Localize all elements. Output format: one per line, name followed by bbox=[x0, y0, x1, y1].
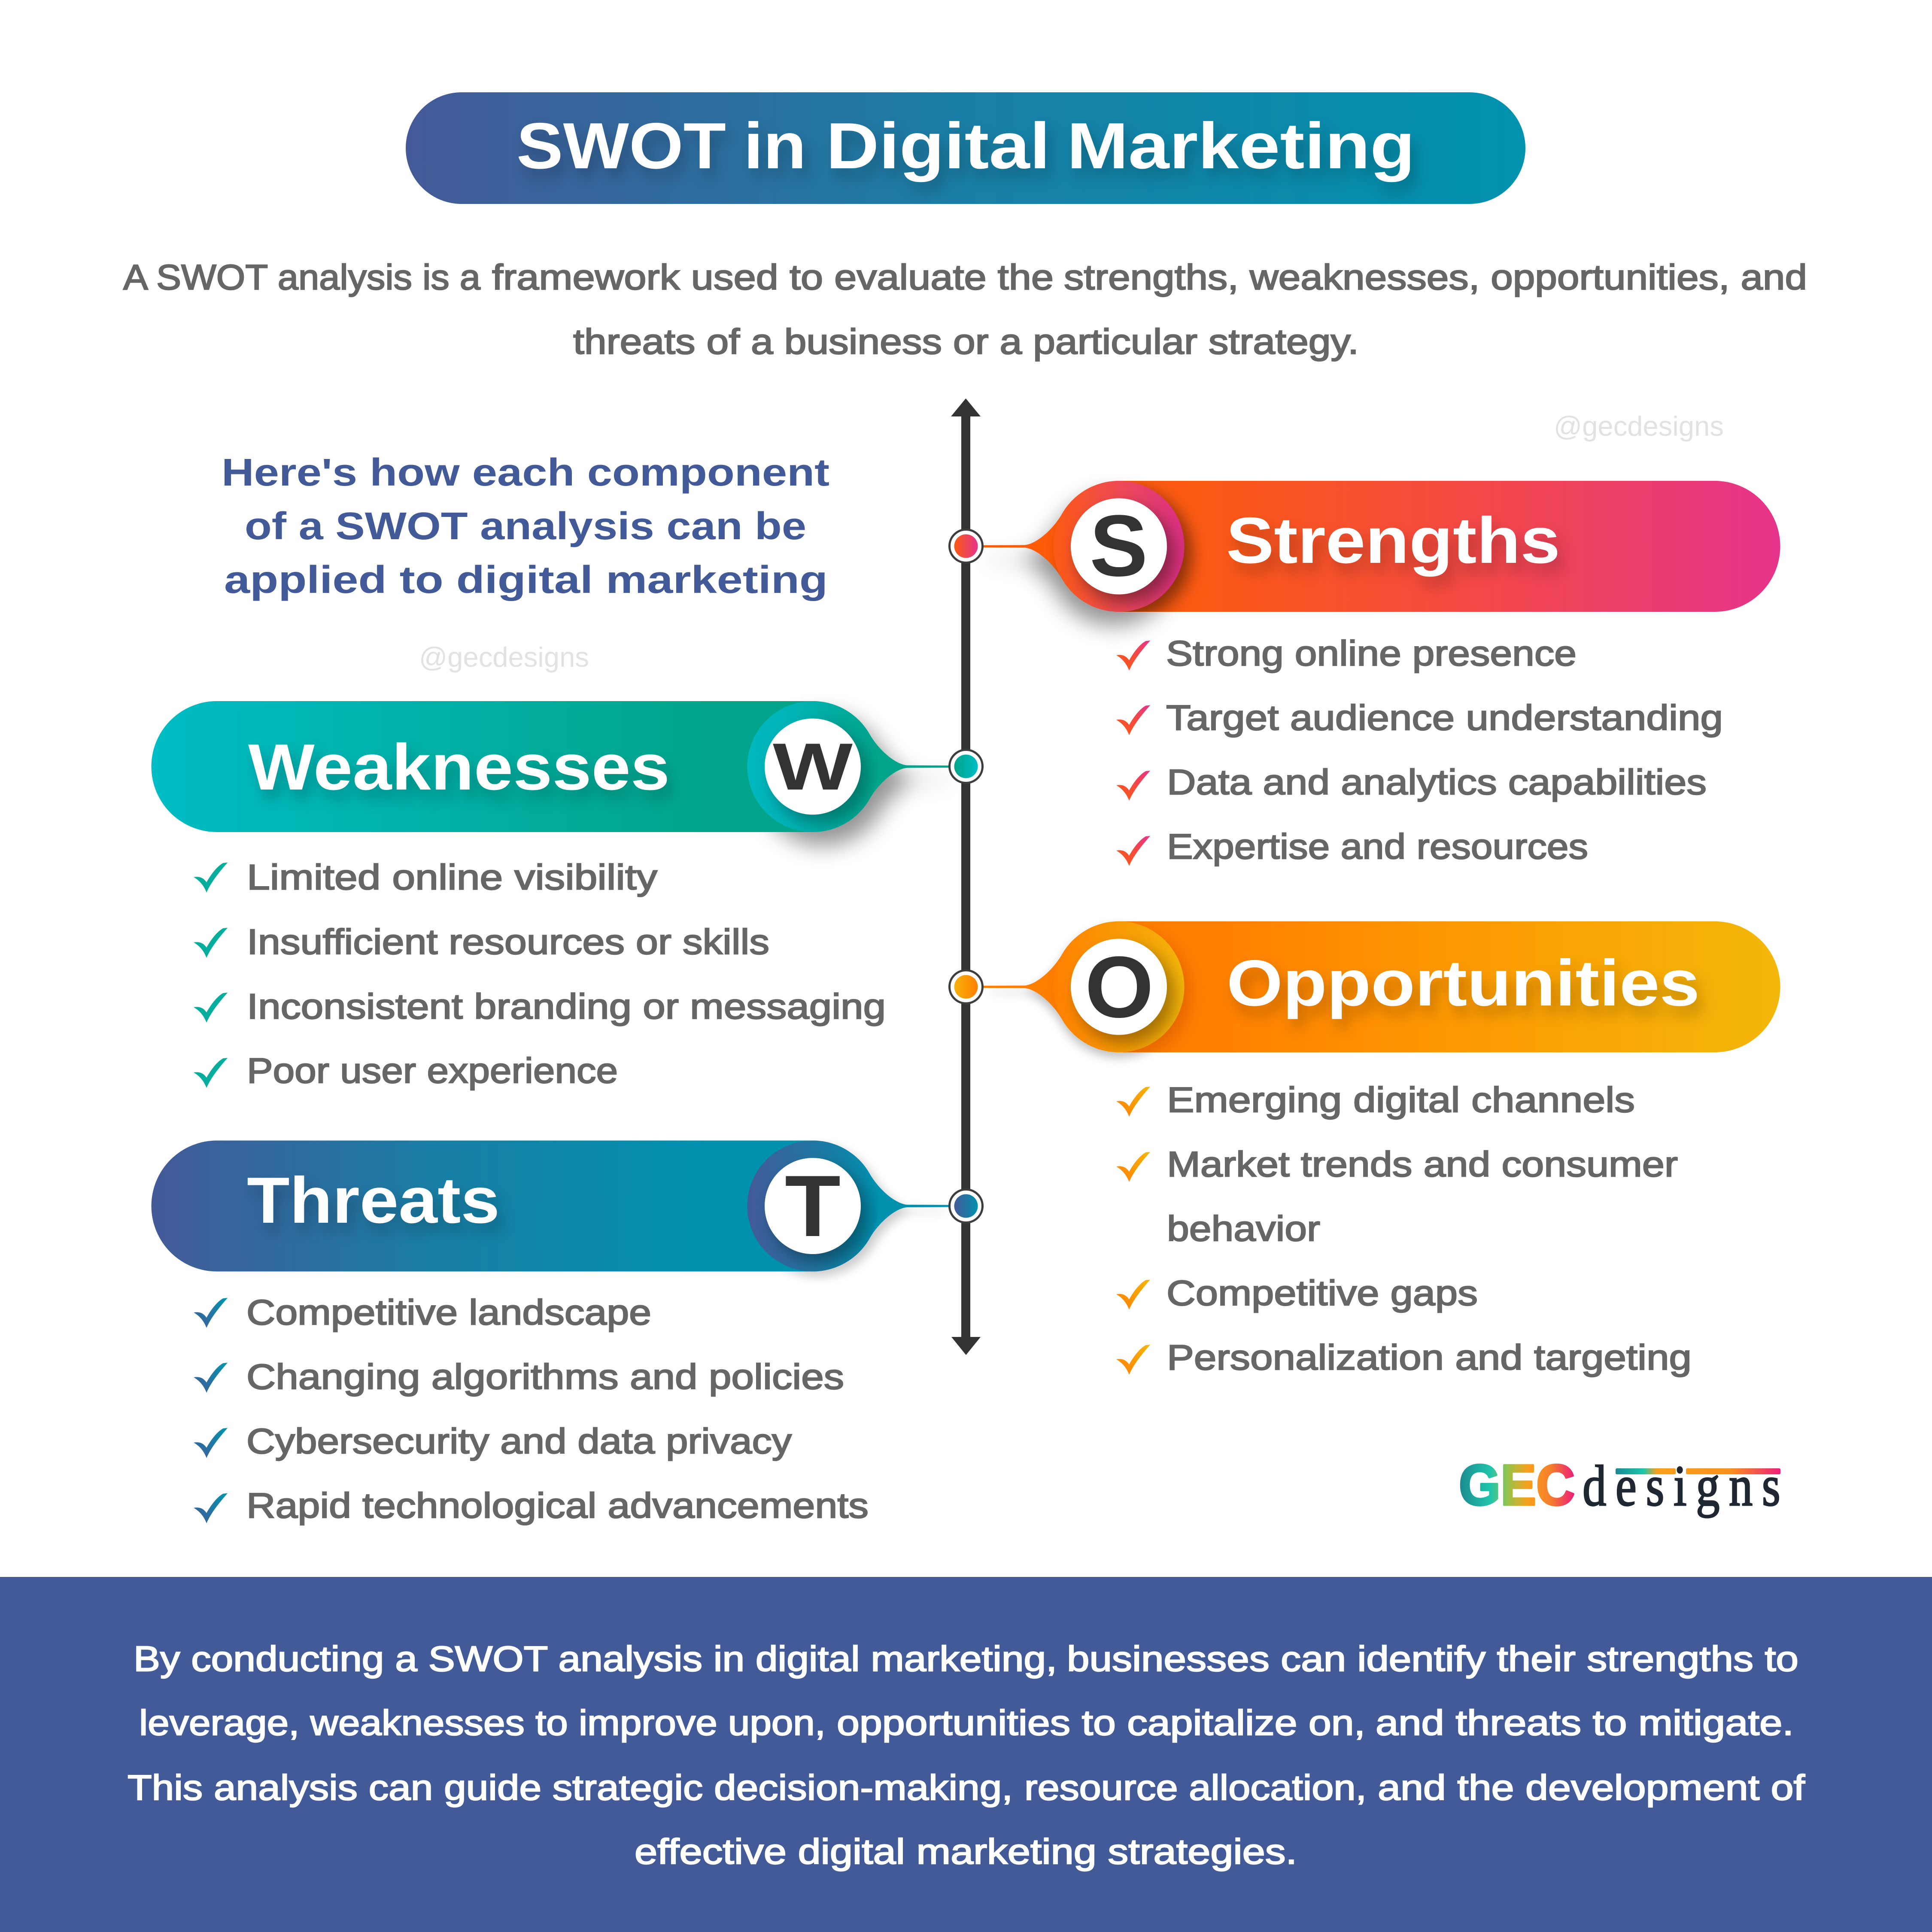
bar shape bbox=[151, 1140, 948, 1272]
intro text bbox=[123, 257, 1807, 361]
footer text: and threats to mitigate. bbox=[1376, 1703, 1794, 1743]
title: Marketing bbox=[1067, 109, 1415, 182]
title: SWOT bbox=[516, 109, 726, 182]
intro text: strengths, weaknesses, opportunities, and bbox=[1064, 257, 1807, 297]
letter O: O bbox=[1085, 939, 1154, 1036]
list: strengths: Data and analytics capabilities bbox=[1167, 762, 1707, 802]
list: strengths bbox=[1116, 633, 1723, 866]
list: threats: Rapid technological advancements bbox=[246, 1485, 869, 1525]
list: opportunities: Personalization and targeting bbox=[1167, 1337, 1692, 1377]
banner: Weaknesses bbox=[151, 701, 982, 846]
list: threats: Cybersecurity and data privacy bbox=[246, 1421, 792, 1461]
footer text: businesses can identify their strengths to bbox=[1067, 1639, 1798, 1679]
label Weaknesses: Weaknesses bbox=[248, 731, 670, 804]
node O bbox=[950, 970, 982, 1003]
logo: GEC designs bbox=[1459, 1453, 1780, 1518]
list: weaknesses: Insufficient resources or skills bbox=[247, 922, 769, 962]
list: threats: Competitive landscape bbox=[246, 1292, 651, 1332]
list: threats: Changing algorithms and policies bbox=[246, 1357, 844, 1397]
intro text: framework used to evaluate the bbox=[492, 257, 1054, 297]
footer text bbox=[128, 1639, 1805, 1871]
lobe shadow bbox=[985, 495, 1179, 626]
footer text: opportunities to capitalize on, bbox=[837, 1703, 1365, 1743]
watermark right: @gecdesigns bbox=[1554, 410, 1724, 442]
banner: Strengths bbox=[950, 481, 1780, 626]
list: opportunities bbox=[1116, 1080, 1692, 1377]
list: weaknesses: Inconsistent branding or messaging bbox=[247, 987, 886, 1026]
logo: GEC designs: GEC bbox=[1459, 1453, 1575, 1517]
node W bbox=[950, 750, 982, 783]
list: opportunities: behavior bbox=[1167, 1209, 1320, 1249]
bar shape bbox=[983, 481, 1780, 619]
lobe shadow bbox=[757, 715, 952, 846]
list: opportunities: Market trends and consumer bbox=[1167, 1144, 1678, 1184]
heading: how each component applies: applied to digital marketing bbox=[224, 559, 828, 601]
list: opportunities: Emerging digital channels bbox=[1167, 1080, 1635, 1120]
list: strengths: Target audience understanding bbox=[1166, 698, 1723, 738]
heading: how each component applies: Here's how each component bbox=[222, 451, 829, 494]
list: strengths: Expertise and resources bbox=[1167, 826, 1588, 866]
bar shape bbox=[983, 921, 1780, 1059]
footer text: By conducting a SWOT analysis in digital marketing, bbox=[134, 1639, 1057, 1679]
list: weaknesses: Limited online visibility bbox=[247, 857, 658, 897]
label Opportunities: Opportunities bbox=[1227, 947, 1700, 1020]
list: weaknesses bbox=[194, 857, 886, 1091]
lobe shadow bbox=[752, 1145, 947, 1277]
intro text: threats of a business or a particular strategy. bbox=[573, 322, 1359, 361]
list: weaknesses: Poor user experience bbox=[247, 1051, 618, 1091]
footer text: resource allocation, bbox=[1024, 1768, 1367, 1807]
footer text: effective digital marketing strategies. bbox=[635, 1832, 1297, 1871]
watermark left: @gecdesigns bbox=[419, 641, 589, 673]
heading: how each component applies bbox=[222, 451, 829, 601]
title: in bbox=[744, 109, 806, 182]
heading: how each component applies: of a SWOT analysis can be bbox=[245, 505, 806, 548]
title banner bbox=[406, 92, 1525, 204]
footer text: leverage, weaknesses to improve upon, bbox=[139, 1703, 826, 1743]
label Threats: Threats bbox=[247, 1164, 500, 1237]
letter T: T bbox=[785, 1157, 841, 1255]
node S bbox=[950, 530, 982, 562]
title bbox=[516, 109, 1415, 182]
footer text: and the development of bbox=[1378, 1768, 1805, 1807]
label Strengths: Strengths bbox=[1226, 504, 1560, 577]
footer text: This analysis can guide strategic decision-making, bbox=[128, 1768, 1013, 1807]
lobe shadow bbox=[990, 927, 1184, 1057]
node T bbox=[950, 1189, 982, 1223]
banner: Threats bbox=[151, 1140, 982, 1277]
title: Digital bbox=[826, 109, 1050, 182]
letter S: S bbox=[1090, 497, 1148, 595]
list: opportunities: Competitive gaps bbox=[1166, 1273, 1478, 1313]
list: strengths: Strong online presence bbox=[1166, 633, 1577, 673]
logo: GEC designs: designs bbox=[1583, 1454, 1780, 1518]
intro text: A SWOT analysis is a bbox=[123, 257, 481, 297]
footer panel bbox=[0, 1577, 1932, 1932]
letter W: W bbox=[773, 729, 853, 804]
central timeline arrow bbox=[951, 398, 981, 1355]
bar shape bbox=[151, 701, 948, 832]
list: threats bbox=[194, 1292, 869, 1525]
banner: Opportunities bbox=[950, 921, 1780, 1059]
